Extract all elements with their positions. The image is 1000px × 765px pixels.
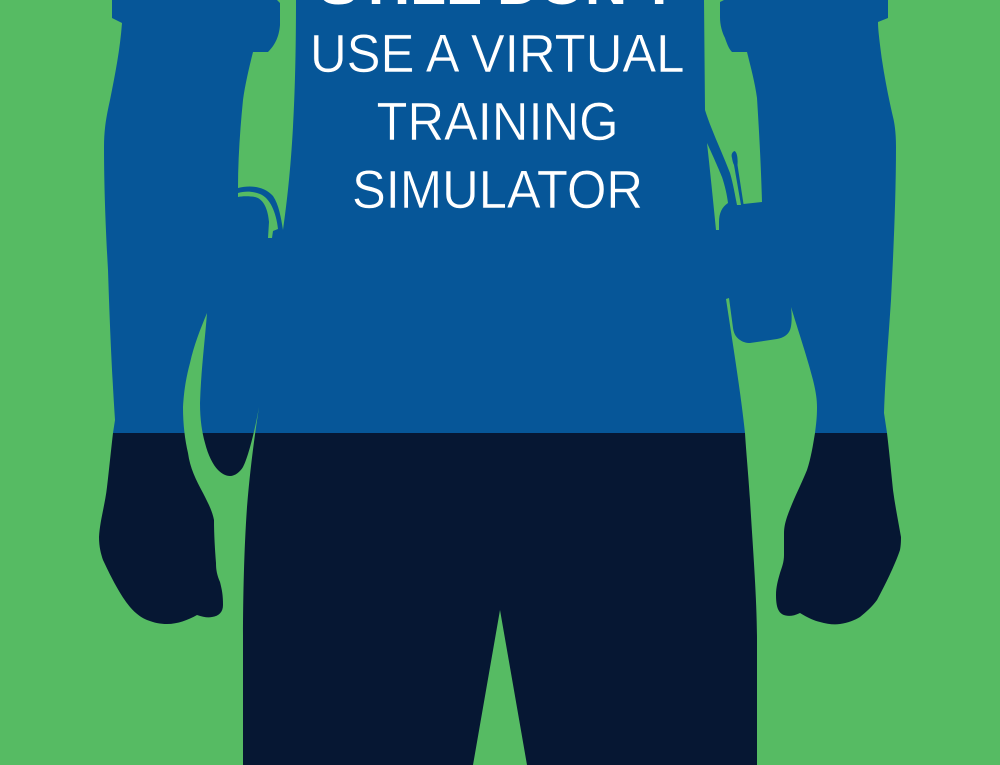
headline line: USE A VIRTUAL: USE A VIRTUAL (310, 25, 684, 84)
sliver beside right radio (707, 143, 728, 230)
headline line: TRAINING: TRAINING (376, 93, 618, 152)
headline line: SIMULATOR: SIMULATOR (352, 161, 643, 220)
left holster cable highlight (238, 192, 278, 238)
headline (310, 0, 684, 220)
gap between left arm and torso (238, 0, 296, 230)
gap between torso and right arm (704, 0, 762, 205)
